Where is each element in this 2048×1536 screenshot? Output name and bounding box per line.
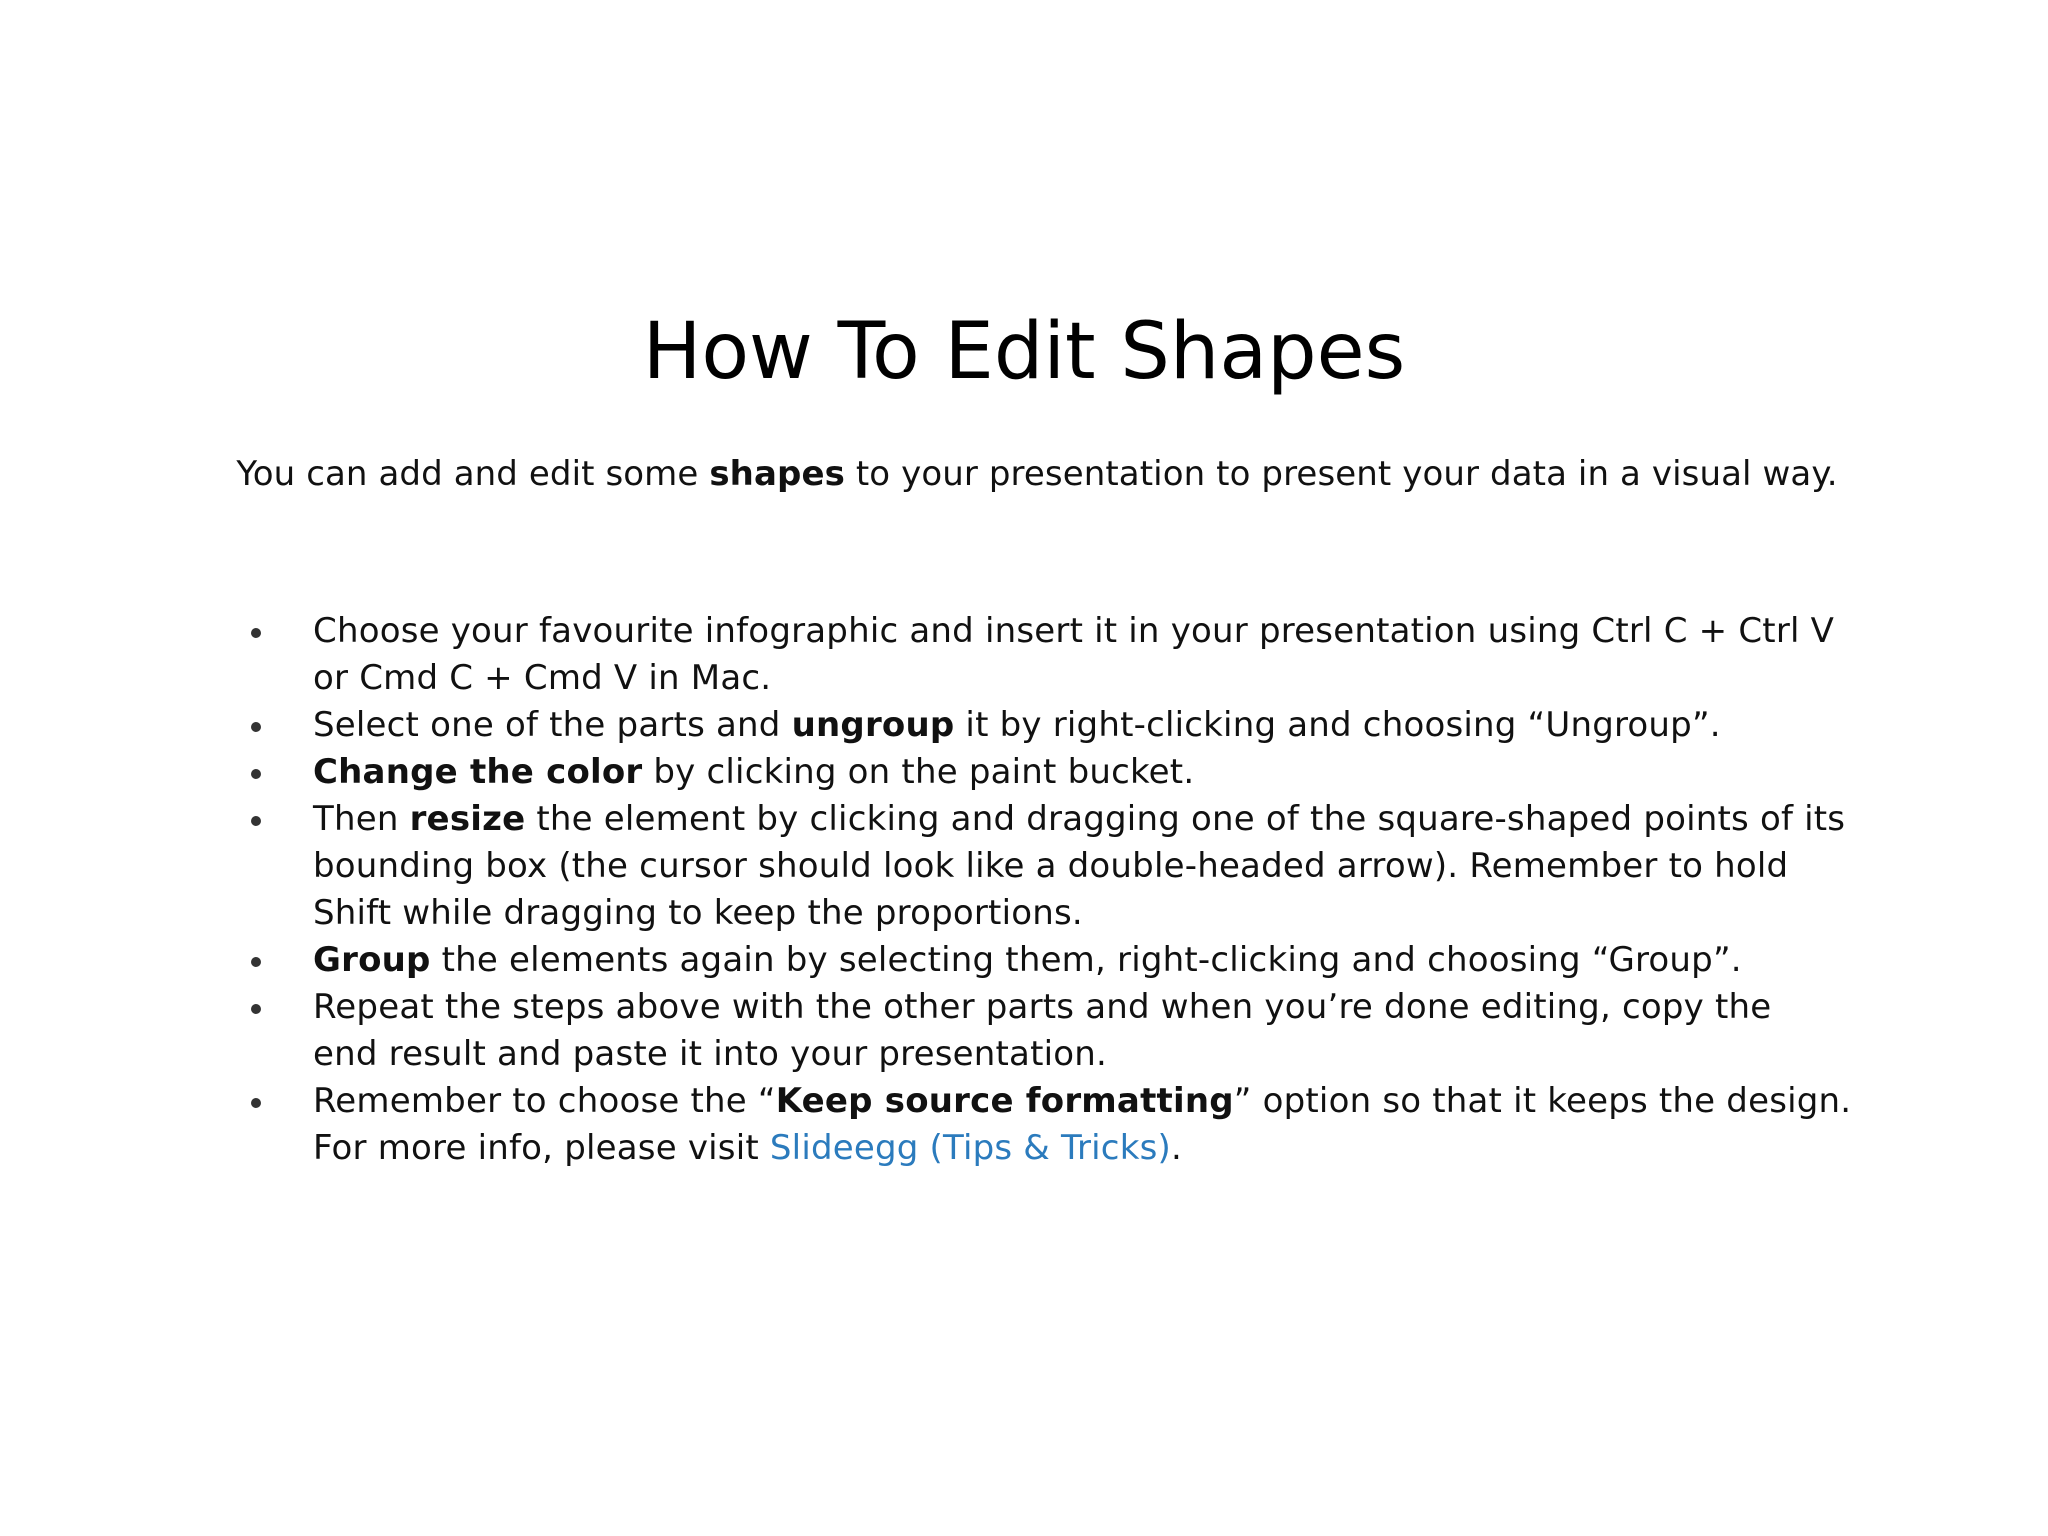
title: How To Edit Shapes [643,307,1405,397]
bullet 4: bounding box (the cursor should look like a double-headed arrow). Remember to hold [313,846,1788,886]
bullet 1 [245,608,1995,702]
bullet 4: Shift while dragging to keep the proportions. [313,893,1083,933]
bullet 4 [245,796,1995,937]
bullet 7 [245,1078,1995,1172]
subtitle: You can add and edit some shapes to your presentation to present your data in a visual way. [236,454,1838,494]
bullet 6: Repeat the steps above with the other parts and when you’re done editing, copy the [313,987,1771,1027]
instructions list [251,611,1851,1168]
bullet 6: end result and paste it into your presentation. [313,1034,1107,1074]
bullet 5: Group the elements again by selecting them, right-clicking and choosing “Group”. [313,940,1742,980]
bullet 3: Change the color by clicking on the paint bucket. [313,752,1194,792]
bullet 4: Then resize the element by clicking and dragging one of the square-shaped points of its [313,799,1845,839]
bullet 1: or Cmd C + Cmd V in Mac. [313,658,771,698]
bullet 7: Remember to choose the “Keep source formatting” option so that it keeps the design. [313,1081,1851,1121]
bullet 1: Choose your favourite infographic and insert it in your presentation using Ctrl C + Ctrl V [313,611,1834,651]
bullet 6 [245,984,1995,1078]
bullet 2: Select one of the parts and ungroup it by right-clicking and choosing “Ungroup”. [313,705,1721,745]
bullet 7: For more info, please visit Slideegg (Tips & Tricks). [313,1128,1182,1168]
